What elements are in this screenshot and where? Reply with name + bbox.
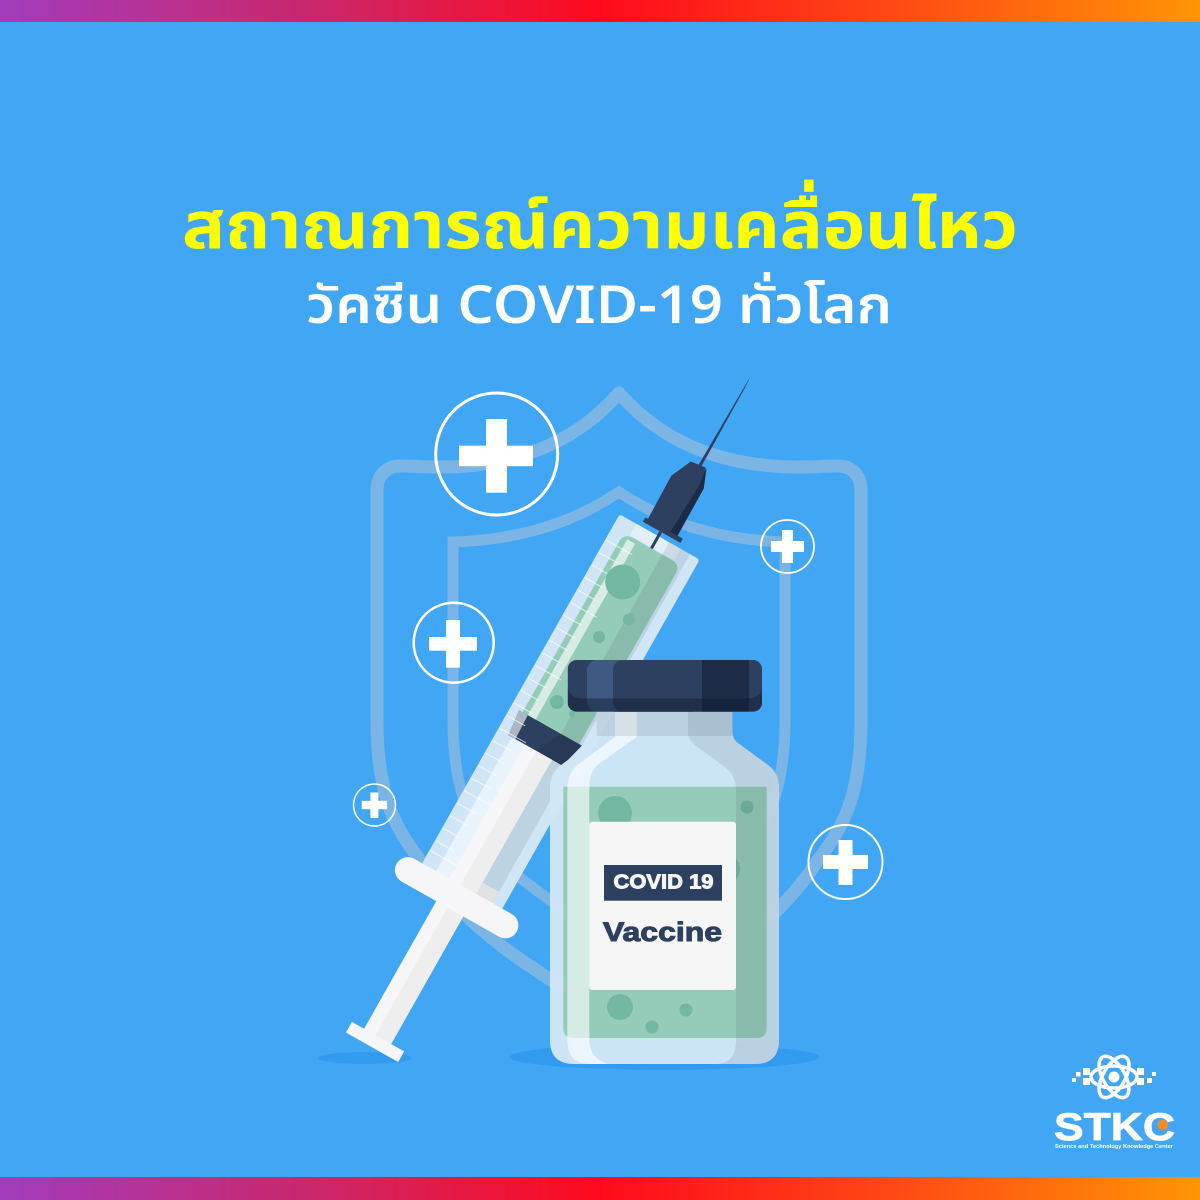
title line 1: สถาณการณ์ความเคลื่อนไหว [182,178,1018,278]
flange [390,852,523,943]
needle [696,376,752,471]
vial cap [568,660,762,712]
barrel shade [561,542,690,746]
top gradient bar [0,0,1200,22]
title line 2: วัคซีน COVID-19 ทั่วโลก [306,269,892,347]
vial label [589,822,736,990]
plus badge upper right [761,520,814,573]
shield outline [377,393,861,1020]
ground shadow: vial [510,1044,820,1070]
vial liquid [563,787,767,1038]
vial body [550,712,779,1064]
barrel top highlight [630,524,681,560]
shield outer [377,393,861,1020]
vial highlight left [567,712,637,1064]
vaccine vial [550,660,779,1064]
label band [604,865,722,901]
ground shadow: syringe [318,1052,412,1064]
logo tagline: Science and Technology Knowledge Center [1055,1144,1174,1150]
title [182,178,1018,347]
shield inner [453,492,785,945]
logo pixel squares [1072,1068,1156,1085]
logo orange dot [1157,1120,1168,1130]
barrel lower shade [476,760,568,904]
graduation ticks [430,540,632,866]
plus badge lower right [808,825,882,899]
logo atom icon [1091,1052,1137,1102]
plus badge large [436,393,558,515]
highlight strip upper [528,539,635,720]
label band: COVID 19 [614,872,714,894]
syringe [312,343,811,1081]
barrel [422,514,700,909]
plunger cap [346,1022,404,1062]
plunger stopper [506,710,582,769]
liquid [518,533,681,752]
liquid bubbles [550,564,640,717]
plunger rod [362,745,552,1047]
vial shade right [688,712,779,1064]
bottom gradient bar [0,1177,1200,1200]
logo wordmark: STKC [1054,1106,1175,1149]
label text vaccine: Vaccine [603,917,722,947]
neck shadow [596,712,732,736]
plus badge left [414,603,494,683]
vial bubbles [598,796,754,1034]
STKC logo [1054,1052,1175,1150]
stem inside barrel [650,531,662,549]
plus badge small lower left [354,784,396,826]
needle hub [646,455,714,537]
highlight strip lower [436,737,525,879]
